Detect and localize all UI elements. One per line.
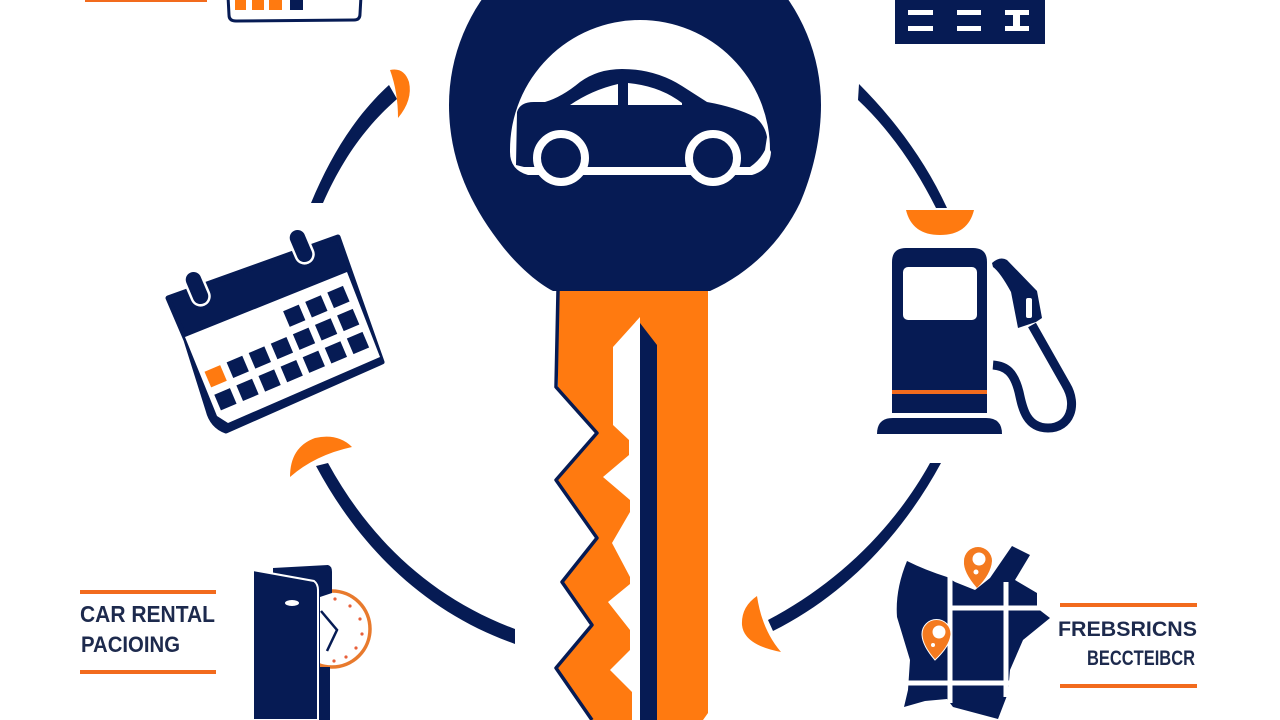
icon: car — [516, 69, 767, 182]
arrow: top-left arc — [311, 70, 410, 203]
callout: right label — [1058, 603, 1197, 688]
panel: top-right cropped card — [895, 0, 1045, 44]
map road grid — [905, 572, 1052, 703]
callout: car rental pricing label — [80, 590, 216, 674]
key: central illustration — [449, 0, 821, 720]
white dome window — [510, 20, 771, 175]
arrow: top-right arc — [858, 84, 974, 235]
key blade — [556, 291, 708, 720]
calendar day grid — [195, 286, 369, 410]
callout: car rental pricing label: PACIOING — [81, 632, 180, 657]
icon: map pin left — [922, 620, 951, 660]
icon: calendar — [168, 226, 382, 431]
arrow: bottom-right arc — [742, 463, 941, 652]
icon: map with pins — [897, 546, 1052, 719]
panel: top-left cropped chart card — [85, 0, 361, 21]
icon: fuel pump — [877, 248, 1072, 434]
key head — [449, 0, 821, 291]
callout: car rental pricing label: CAR RENTAL — [80, 601, 215, 627]
callout: right label: BECCTEIBCR — [1087, 647, 1195, 670]
icon: map pin top — [964, 547, 992, 588]
arrow: bottom-left arc — [290, 437, 515, 644]
clock — [294, 591, 370, 667]
icon: wallet with clock — [253, 565, 370, 720]
callout: right label: FREBSRICNS — [1058, 618, 1197, 641]
